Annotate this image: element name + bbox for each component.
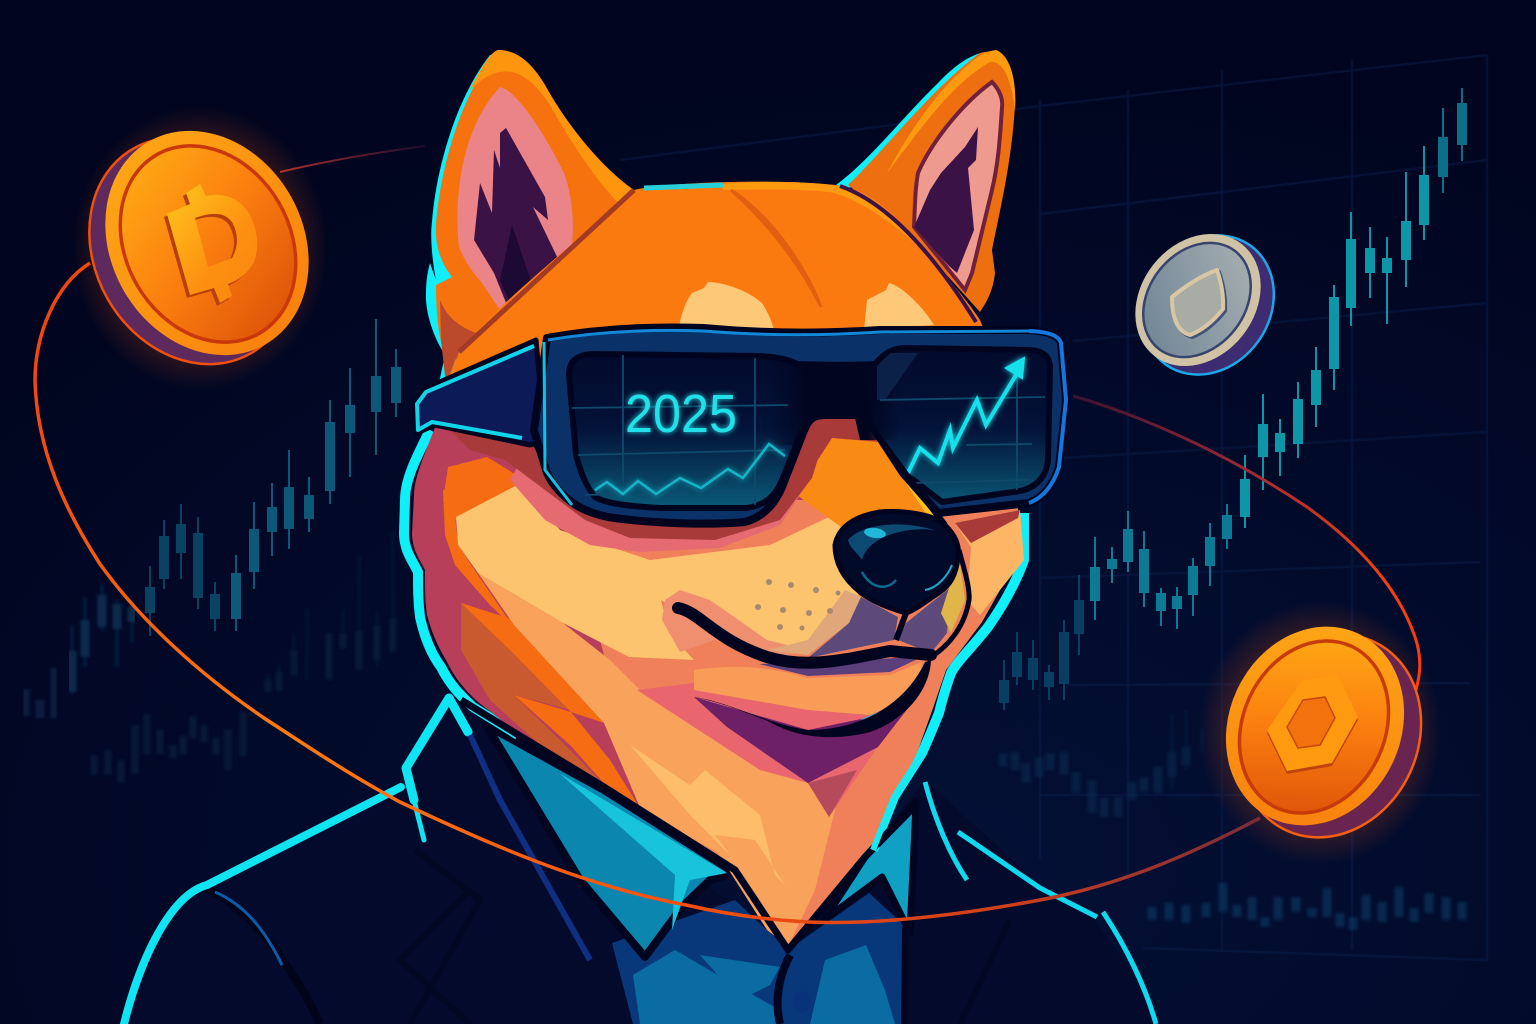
face cyan outline [404,430,1024,850]
placket and button [778,955,790,1024]
mid peach [478,573,835,947]
jacket cyan outline left [124,698,468,1024]
chin mauve wedge [808,770,857,817]
nose bridge over lens [872,428,945,525]
face base crimson [412,425,1018,950]
cheek dark orange [461,603,616,797]
chin purple [694,690,922,783]
mouth patch pink [662,590,808,662]
icon: D coin symbol [164,184,257,306]
candlestick chart right: faint mid bars [1003,710,1202,817]
right cheek [955,510,1024,615]
candlestick chart right: main rising series [1004,88,1462,710]
lens reflection [877,353,918,400]
coin: bottom right orange hexagon coin [1194,597,1454,867]
ear inner dark [914,127,978,273]
icon: shield symbol [1172,270,1225,337]
lens text 2025: 2025 [625,384,737,444]
shirt [486,725,916,1024]
lens chart arrow right [907,358,1024,475]
shadow under glasses [510,430,825,552]
candlestick chart right: faint lower bars [1152,883,1462,930]
head crease [731,190,821,307]
muzzle tan [767,590,861,655]
lower jaw pink [637,683,900,817]
orbit: upper left segment [280,146,425,172]
cheek orange top patch [443,457,525,520]
glasses lens [569,348,1050,508]
orbit: lower sweep in front of suit [35,263,1260,923]
coin: left orange D coin [49,94,349,402]
notch shadow [808,418,880,475]
nose bridge orange [790,415,945,530]
suit jacket [120,698,1160,1024]
chin cyan accent [860,680,922,720]
chart grid panel right [620,55,1487,960]
shirt collar right [824,805,916,933]
ear: left [426,50,634,392]
face coral [600,500,1018,950]
glasses temple arm [415,340,545,445]
jacket cyan outline right [925,782,1156,1024]
muzzle purple [808,597,898,658]
shirt collar left [486,725,735,957]
light fur tufts [630,745,785,885]
lens bridge dark [770,362,900,445]
ear inner dark [474,128,560,310]
head cream spots [679,282,774,330]
mouth line [678,608,931,663]
lower lip line [694,660,931,737]
nose [835,512,969,657]
ear: right [836,50,1015,312]
face [404,415,1024,950]
lip purple [759,657,922,676]
cheek orange strip [443,480,514,628]
glasses frame [534,327,1066,524]
head top fur [450,182,1000,400]
whisker dots [755,579,840,630]
icon: hexagon symbol [1267,674,1358,774]
lens chart line left [595,444,785,494]
face outline lower [461,700,918,950]
candlestick chart left: faint background series [94,531,393,783]
jacket lapel shading [400,850,1010,1024]
ear inner pink [457,87,573,310]
cream muzzle [456,483,861,660]
coin: silver coin [1109,209,1301,400]
sunglasses [415,327,1066,525]
ear inner pink [914,82,1002,290]
orbit: upper right segment [1073,396,1420,690]
chin peach [694,662,922,715]
lens grid [572,355,1045,505]
candlestick chart left: main series [25,319,396,718]
